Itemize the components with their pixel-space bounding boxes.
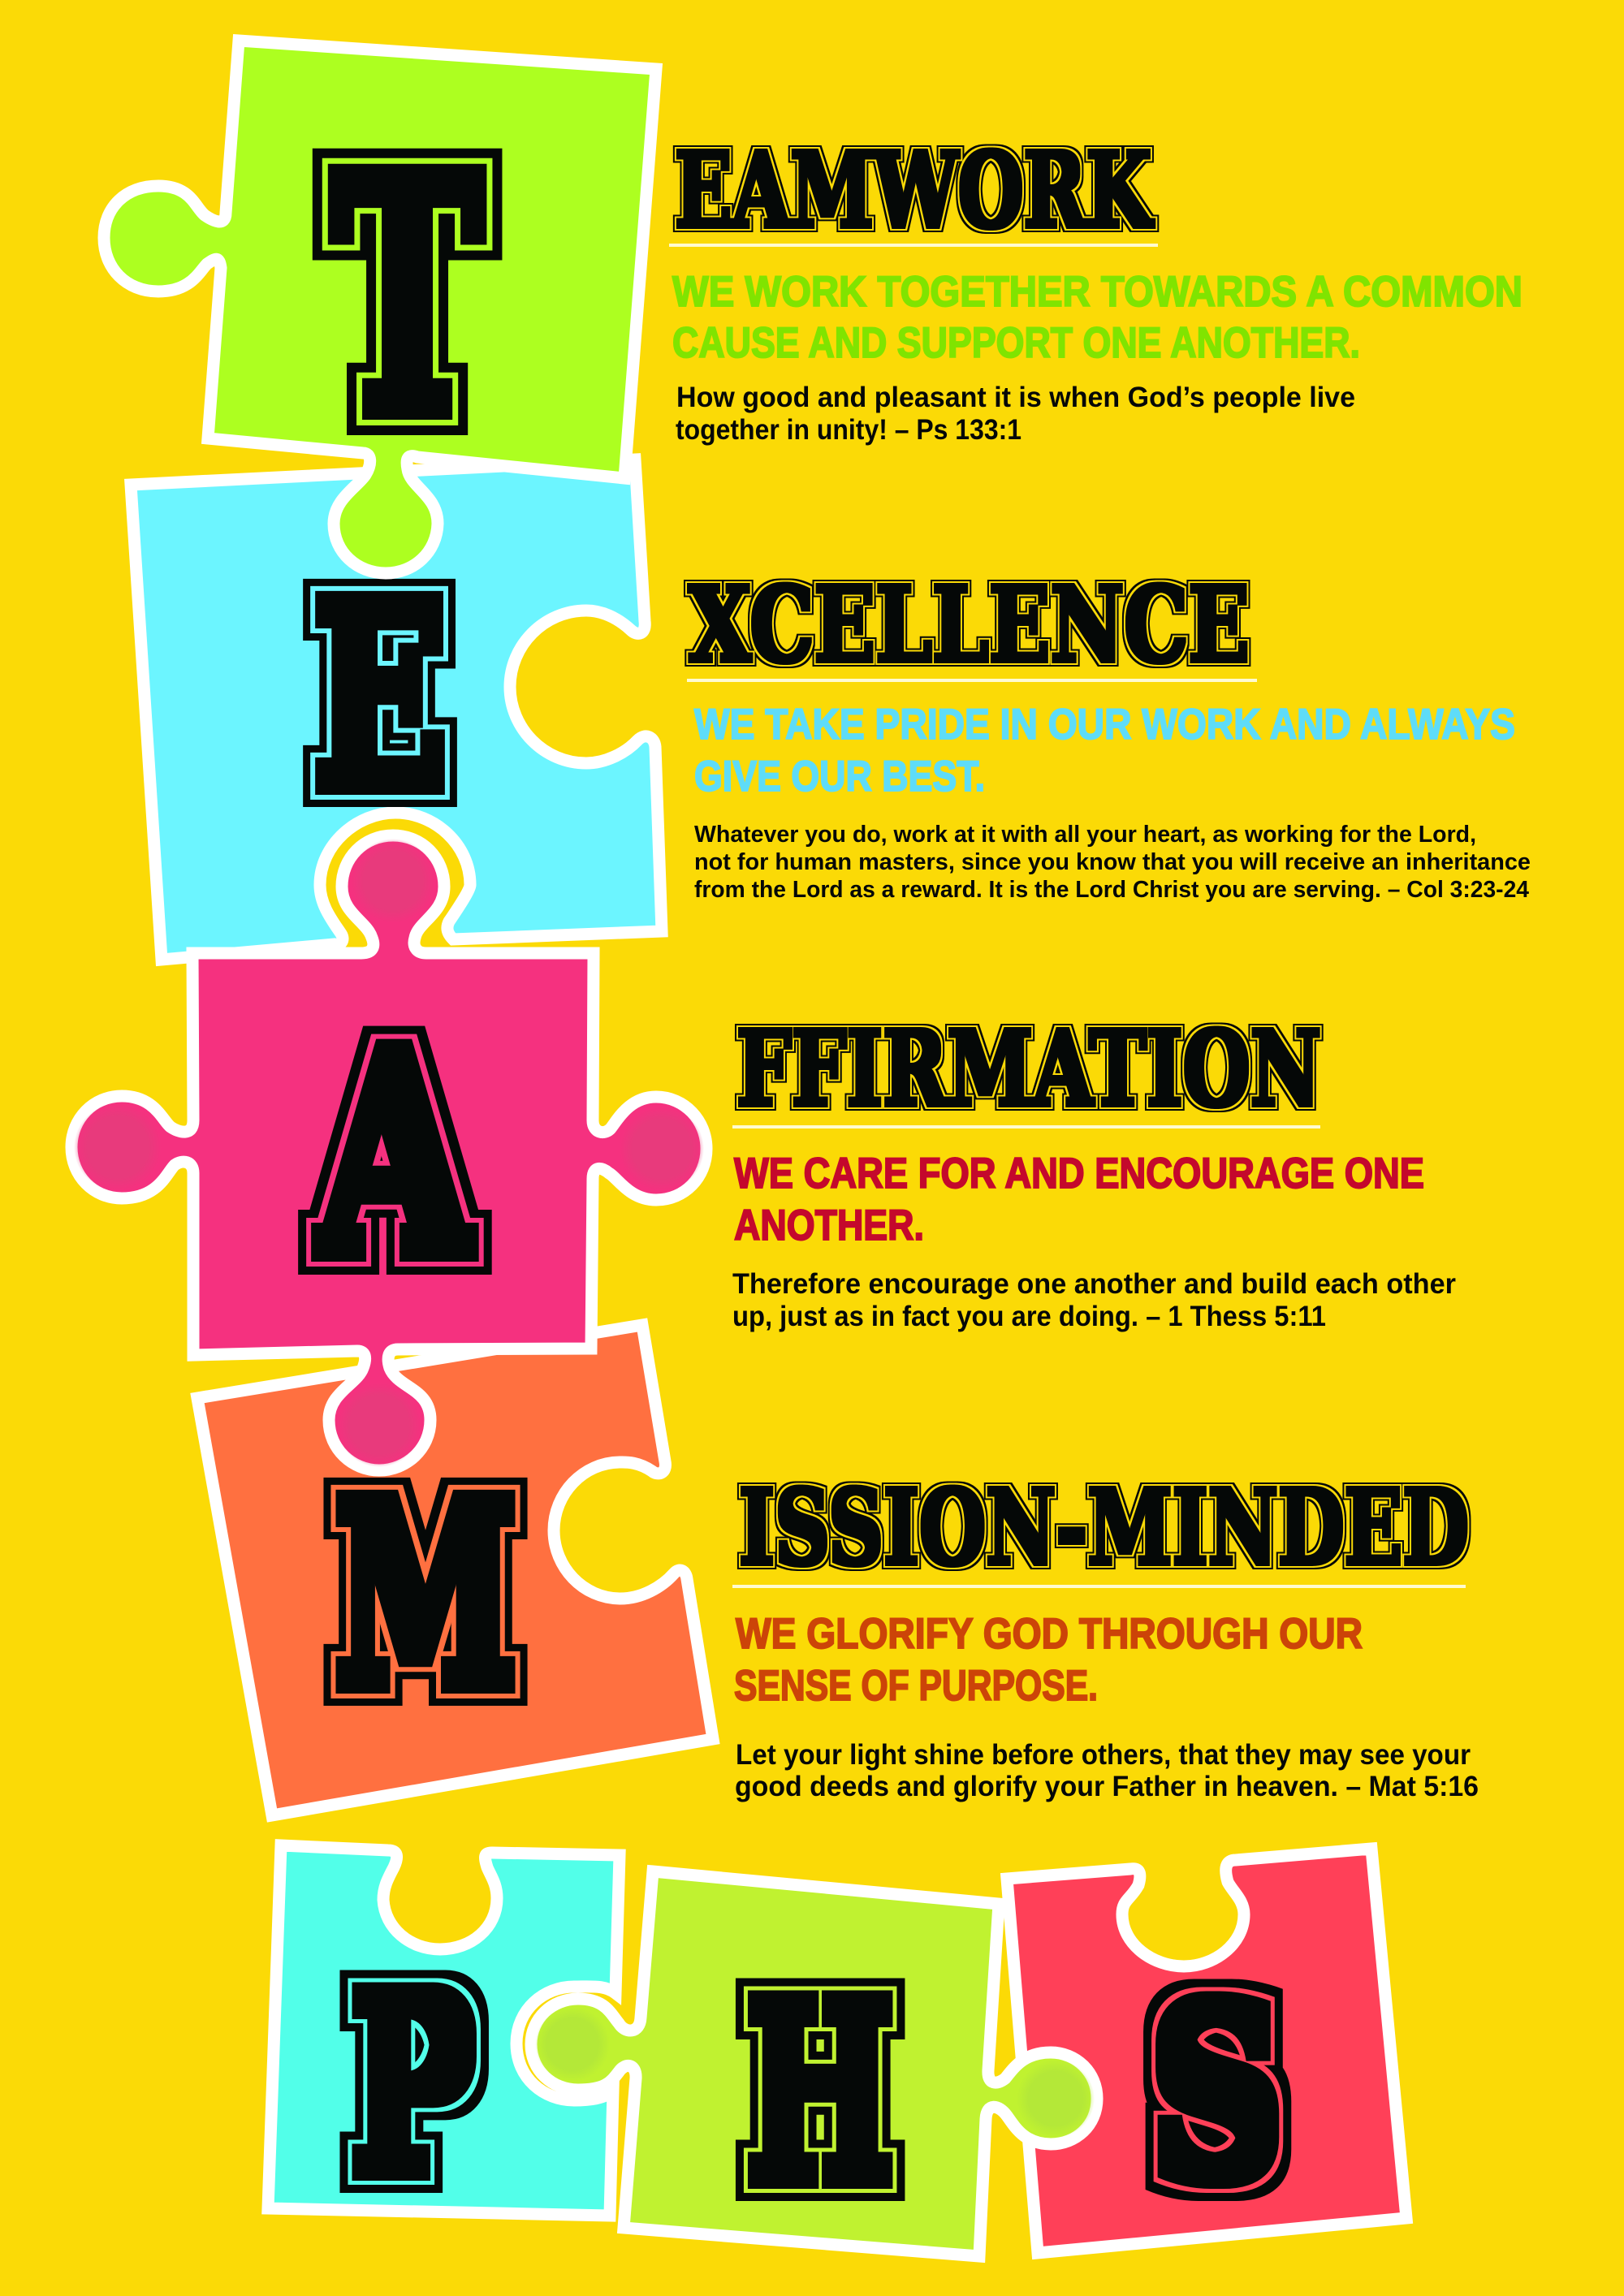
section: Excellence bbox=[687, 564, 1531, 903]
section: Affirmation bbox=[732, 1008, 1456, 1332]
heading: Xcellence: XCELLENCE bbox=[689, 564, 1250, 685]
puzzle piece: A bbox=[71, 835, 706, 1470]
verse: Colossians 3:23-24 bbox=[694, 822, 1531, 903]
puzzle piece: T bbox=[104, 41, 656, 573]
letter M: M bbox=[335, 1450, 516, 1741]
subheading: Mission-minded: SENSE OF PURPOSE. bbox=[734, 1662, 1098, 1710]
verse: Colossians 3:23-24: from the Lord as a reward. It is the Lord Christ you are serving. – Col 3:23-24 bbox=[694, 877, 1529, 903]
subheading: Teamwork: CAUSE AND SUPPORT ONE ANOTHER. bbox=[672, 319, 1360, 367]
subheading: Excellence: WE TAKE PRIDE IN OUR WORK AND ALWAYS bbox=[694, 701, 1515, 749]
letter H: H bbox=[747, 1952, 893, 2235]
subheading: Affirmation: ANOTHER. bbox=[734, 1202, 924, 1249]
verse: Colossians 3:23-24: not for human masters, since you know that you will receive an inheritance bbox=[694, 849, 1531, 875]
heading: Ffirmation: FFIRMATION bbox=[736, 1008, 1321, 1129]
verse: Matthew 5:16: good deeds and glorify your Father in heaven. – Mat 5:16 bbox=[735, 1771, 1479, 1802]
letter P: P bbox=[351, 1944, 474, 2227]
subheading: Mission-minded bbox=[734, 1610, 1363, 1710]
subheading: Teamwork: WE WORK TOGETHER TOWARDS A COMMON bbox=[672, 268, 1522, 316]
verse: Colossians 3:23-24: Whatever you do, work at it with all your heart, as working for the Lord, bbox=[694, 822, 1476, 848]
verse: 1 Thessalonians 5:11 bbox=[732, 1268, 1456, 1332]
puzzle piece: M bbox=[197, 1325, 713, 1815]
verse: 1 Thessalonians 5:11: up, just as in fact you are doing. – 1 Thess 5:11 bbox=[732, 1301, 1326, 1332]
verse: Matthew 5:16 bbox=[735, 1739, 1479, 1802]
puzzle piece: S bbox=[1007, 1849, 1406, 2253]
subheading: Excellence bbox=[694, 701, 1515, 801]
section: Teamwork bbox=[669, 130, 1522, 446]
letter A: A bbox=[316, 993, 474, 1315]
verse: Psalm 133:1 bbox=[676, 382, 1355, 446]
verse: Psalm 133:1: together in unity! – Ps 133:1 bbox=[676, 414, 1021, 446]
puzzle piece: H bbox=[531, 1871, 1097, 2256]
letter T: T bbox=[332, 108, 482, 484]
verse: Matthew 5:16: Let your light shine before others, that they may see your bbox=[736, 1739, 1471, 1771]
verse: Psalm 133:1: How good and pleasant it is when God’s people live bbox=[676, 382, 1355, 413]
subheading: Affirmation: WE CARE FOR AND ENCOURAGE ONE bbox=[734, 1150, 1424, 1198]
heading: Eamwork: EAMWORK bbox=[675, 130, 1154, 251]
section: Mission-minded bbox=[732, 1467, 1479, 1802]
puzzle piece: P bbox=[268, 1845, 620, 2227]
letter S: S bbox=[1150, 1957, 1284, 2229]
verse: 1 Thessalonians 5:11: Therefore encourage one another and build each other bbox=[732, 1268, 1456, 1300]
puzzle piece: E bbox=[131, 460, 662, 960]
subheading: Teamwork bbox=[672, 268, 1522, 367]
subheading: Excellence: GIVE OUR BEST. bbox=[694, 753, 985, 801]
subheading: Affirmation bbox=[734, 1150, 1424, 1249]
subheading: Mission-minded: WE GLORIFY GOD THROUGH OUR bbox=[736, 1610, 1363, 1658]
letter E: E bbox=[313, 551, 447, 843]
